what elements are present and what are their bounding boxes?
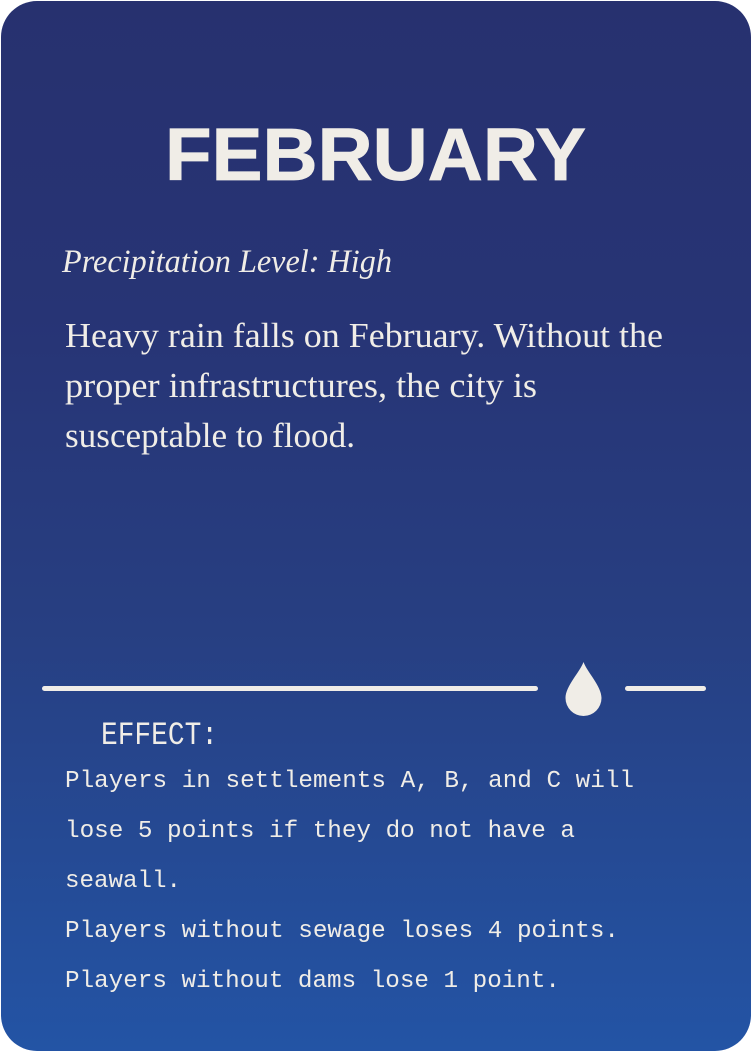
description text: proper infrastructures, the city is (65, 366, 537, 405)
precipitation level subtitle: Precipitation Level: High (61, 244, 392, 280)
effect text: Players in settlements A, B, and C will (65, 768, 634, 795)
effect text: seawall. (65, 868, 181, 895)
effect text (65, 768, 634, 995)
effect heading: EFFECT: (101, 717, 218, 754)
effect text: lose 5 points if they do not have a (65, 818, 575, 845)
description text: Heavy rain falls on February. Without the (65, 316, 663, 355)
effect text: Players without dams lose 1 point. (65, 968, 560, 995)
divider with water drop (42, 662, 706, 716)
description text: susceptable to flood. (65, 416, 355, 455)
description text (65, 316, 663, 455)
effect text: Players without sewage loses 4 points. (65, 918, 619, 945)
title: FEBRUARY (165, 113, 586, 196)
icon: water drop (566, 662, 602, 716)
